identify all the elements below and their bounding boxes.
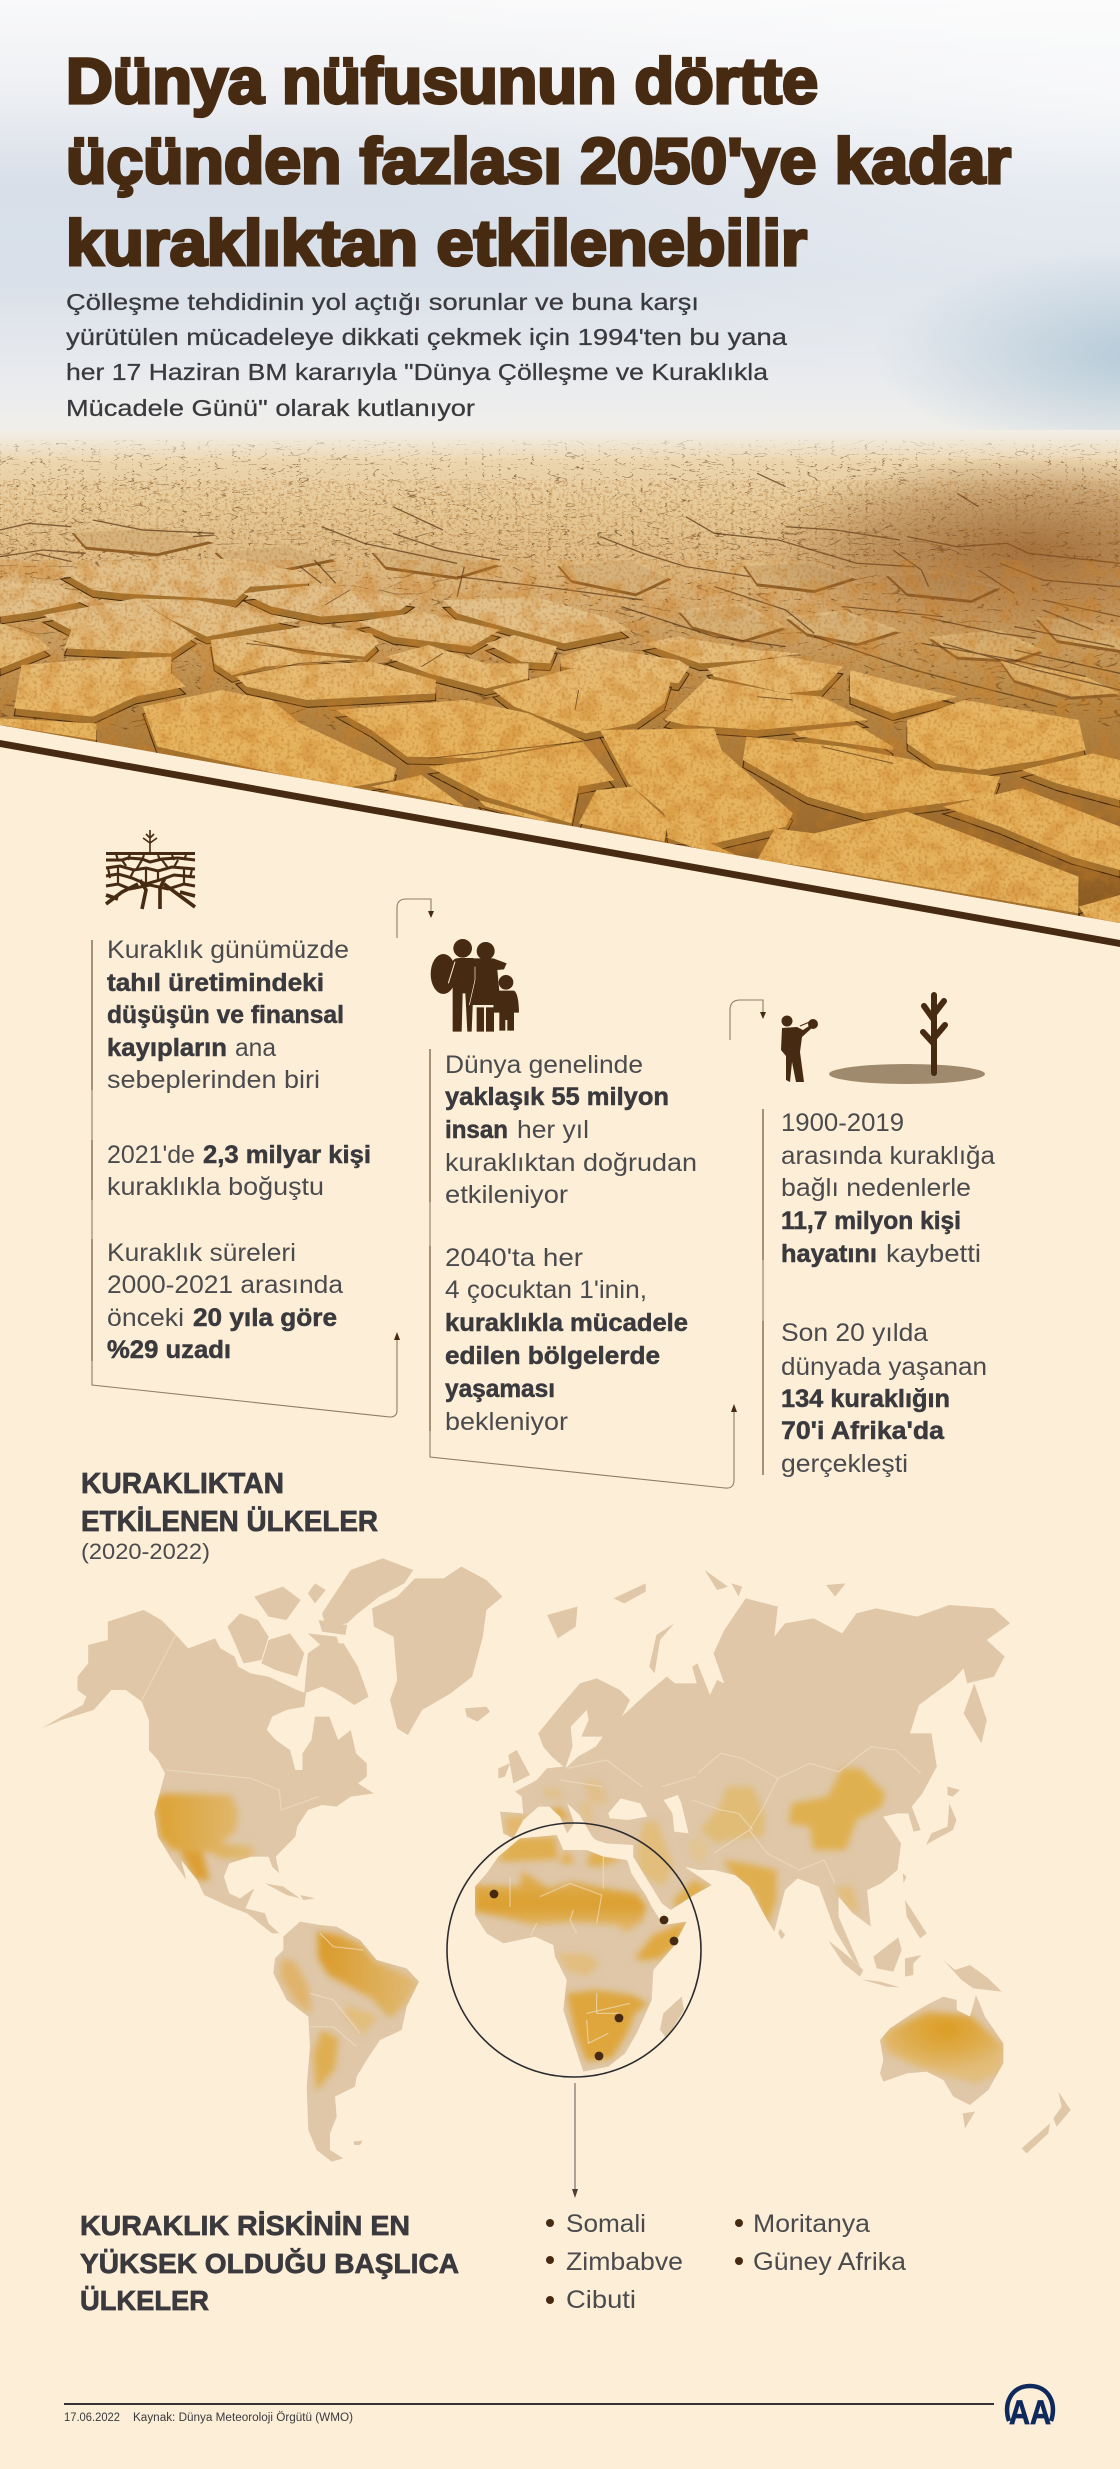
text block: 55 million people: kuraklıktan doğrudan: [445, 1149, 697, 1177]
country list: Moritanya: [753, 2210, 870, 2238]
text block: 11.7 million deaths: bağlı nedenlerle: [781, 1174, 971, 1202]
text block: drought and grain production: tahıl üretimindeki: [107, 969, 324, 997]
footer rule: [64, 2403, 994, 2405]
text block: drought duration: önceki: [107, 1304, 184, 1332]
text block: children in 2040: [445, 1244, 688, 1436]
text block: drought and grain production: [107, 936, 349, 1094]
header sky background: [0, 0, 1120, 445]
text block: 2.3 billion people: 2,3 milyar kişi: [203, 1141, 371, 1169]
text block: 55 million people: etkileniyor: [445, 1181, 568, 1209]
text block: children in 2040: kuraklıkla mücadele: [445, 1309, 688, 1337]
map heading: ETKİLENEN ÜLKELER: [81, 1505, 378, 1538]
text block: 55 million people: [445, 1051, 697, 1209]
text block: children in 2040: yaşaması: [445, 1375, 555, 1403]
country borders: [142, 1635, 921, 2047]
heading: highest drought risk countries: [80, 2210, 459, 2316]
text block: drought and grain production: kayıpların: [107, 1034, 227, 1062]
column 3 divider line: [762, 1109, 764, 1475]
text block: 11.7 million deaths: hayatını: [781, 1240, 877, 1268]
text block: 134 droughts: Son 20 yılda: [781, 1319, 928, 1347]
column 1 connector and arrows: [92, 899, 434, 1417]
text block: 134 droughts: 134 kuraklığın: [781, 1385, 950, 1413]
text block: drought and grain production: Kuraklık günümüzde: [107, 936, 349, 964]
heading: highest drought risk countries: KURAKLIK RİSKİNİN EN: [80, 2210, 410, 2241]
country list: Somali: [566, 2210, 646, 2238]
logo: AA: AA: [1009, 2394, 1051, 2432]
text block: 11.7 million deaths: 11,7 milyon kişi: [781, 1207, 961, 1235]
title: kuraklıktan etkilenebilir: [66, 207, 807, 279]
country list: Cibuti: [566, 2286, 636, 2314]
drought affected areas: [154, 1768, 1005, 2092]
text block: drought and grain production: ana: [235, 1034, 276, 1062]
text block: 11.7 million deaths: [781, 1109, 995, 1268]
title: [66, 45, 1011, 279]
icon: cracked soil with dry sprout: [106, 830, 195, 909]
text block: 2.3 billion people: kuraklıkla boğuştu: [107, 1173, 324, 1201]
text block: 11.7 million deaths: 1900-2019: [781, 1109, 904, 1137]
text block: drought and grain production: düşüşün ve finansal: [107, 1001, 344, 1029]
land masses: [42, 1558, 1071, 2162]
text block: 11.7 million deaths: kaybetti: [886, 1240, 981, 1268]
text block: 55 million people: Dünya genelinde: [445, 1051, 643, 1079]
subtitle: Çölleşme tehdidinin yol açtığı sorunlar ve buna karşı: [66, 289, 699, 315]
text block: drought duration: 20 yıla göre: [193, 1304, 337, 1332]
text block: drought and grain production: sebeplerinden biri: [107, 1066, 320, 1094]
photo: cracked dry earth: [0, 428, 1120, 931]
icon: displaced family: [431, 939, 519, 1032]
world map: [42, 1558, 1071, 2162]
footer date and source: Kaynak: Dünya Meteoroloji Örgütü (WMO): [133, 2412, 353, 2424]
text block: drought duration: [107, 1239, 343, 1364]
column 2 connector and arrow: [430, 1000, 766, 1488]
text block: 134 droughts: dünyada yaşanan: [781, 1353, 987, 1381]
text block: children in 2040: bekleniyor: [445, 1408, 568, 1436]
country list: Güney Afrika: [753, 2248, 906, 2276]
text block: drought duration: %29 uzadı: [107, 1336, 231, 1364]
text block: 55 million people: insan: [445, 1116, 508, 1144]
text block: drought duration: Kuraklık süreleri: [107, 1239, 296, 1267]
text block: drought duration: 2000-2021 arasında: [107, 1271, 343, 1299]
text block: 55 million people: her yıl: [517, 1116, 589, 1144]
title: Dünya nüfusunun dörtte: [66, 45, 818, 117]
diagonal dark stripe: [0, 740, 1120, 947]
text block: 11.7 million deaths: arasında kuraklığa: [781, 1142, 995, 1170]
arrow from circle to country list: [572, 2083, 578, 2198]
text block: children in 2040: edilen bölgelerde: [445, 1342, 660, 1370]
circle around Africa: [447, 1823, 701, 2077]
map heading: (2020-2022): [81, 1539, 210, 1564]
heading: highest drought risk countries: ÜLKELER: [80, 2285, 209, 2316]
footer date and source: 17.06.2022: [64, 2412, 120, 2424]
text block: 2.3 billion people: 2021'de: [107, 1141, 195, 1169]
map heading: [81, 1468, 378, 1564]
seas cut out of land: [565, 1710, 689, 1915]
subtitle: her 17 Haziran BM kararıyla "Dünya Çölleşme ve Kuraklıkla: [66, 359, 769, 385]
title: üçünden fazlası 2050'ye kadar: [66, 125, 1011, 197]
country list: Zimbabve: [566, 2248, 683, 2276]
text block: 55 million people: yaklaşık 55 milyon: [445, 1083, 669, 1111]
icon: traveller walking to bare tree: [781, 995, 985, 1084]
country list: [546, 2210, 906, 2314]
heading: highest drought risk countries: YÜKSEK OLDUĞU BAŞLICA: [80, 2248, 459, 2279]
text block: 134 droughts: [781, 1319, 987, 1478]
text block: 134 droughts: 70'i Afrika'da: [781, 1417, 945, 1445]
subtitle: Mücadele Günü" olarak kutlanıyor: [66, 395, 475, 421]
map heading: KURAKLIKTAN: [81, 1468, 284, 1500]
text block: 134 droughts: gerçekleşti: [781, 1450, 908, 1478]
subtitle: [66, 289, 788, 421]
subtitle: yürütülen mücadeleye dikkati çekmek için 1994'ten bu yana: [66, 324, 788, 350]
risk country markers: [490, 1890, 678, 2060]
text block: children in 2040: 4 çocuktan 1'inin,: [445, 1276, 647, 1304]
text block: children in 2040: 2040'ta her: [445, 1244, 583, 1272]
text block: 2.3 billion people: [107, 1141, 371, 1201]
